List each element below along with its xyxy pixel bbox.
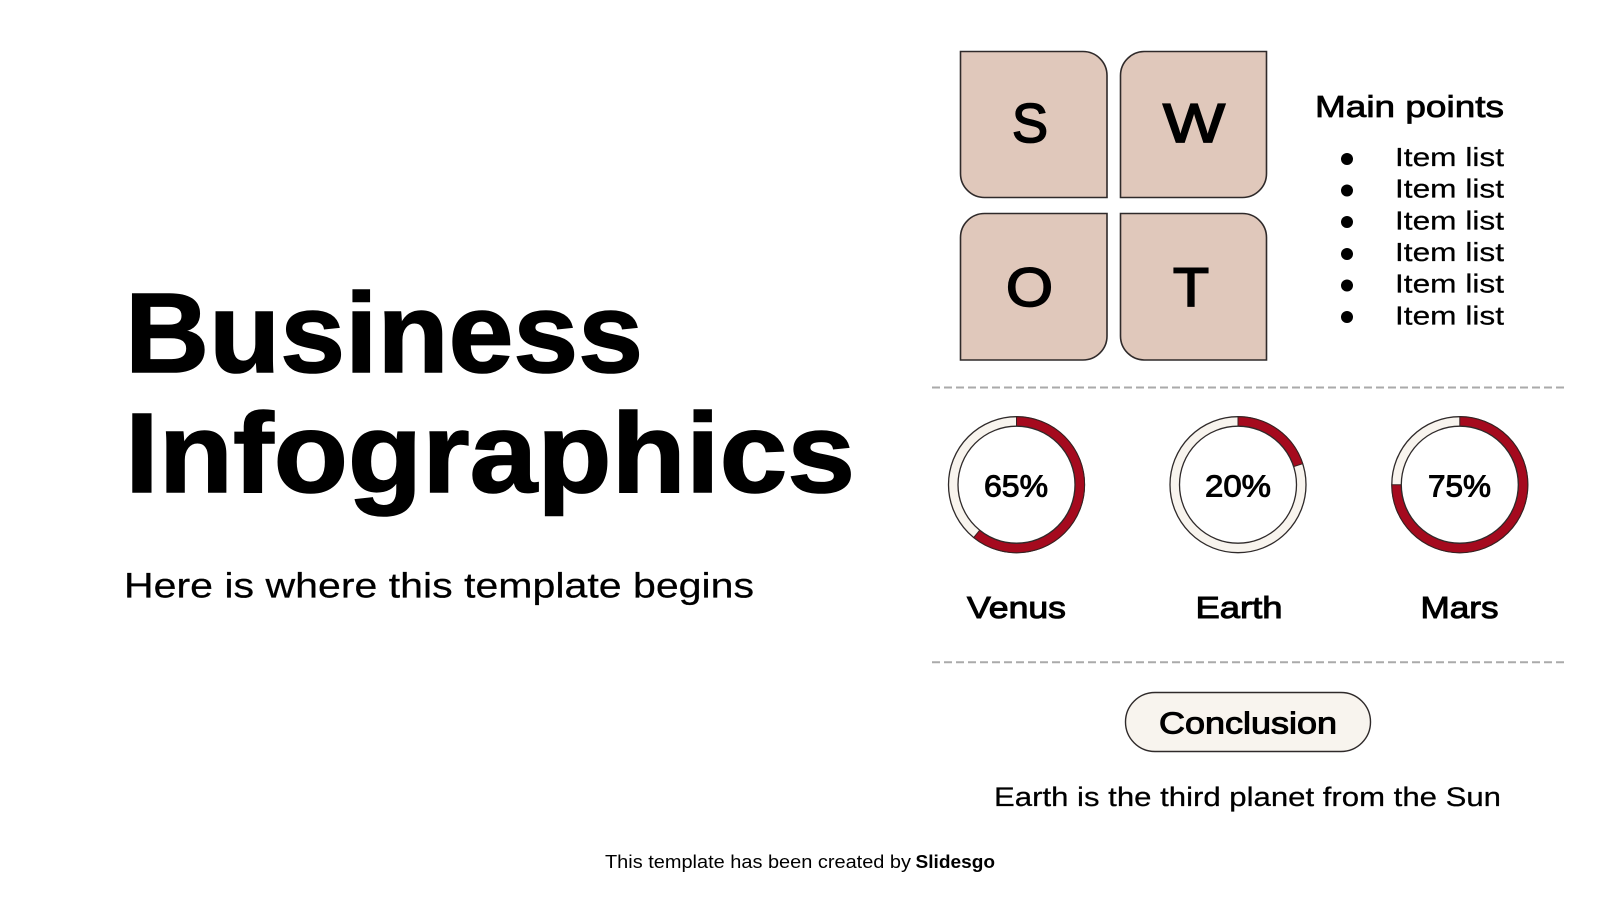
tile: S <box>960 52 1107 198</box>
tile: W: W <box>1163 92 1225 154</box>
label: Venus: Venus <box>967 590 1066 625</box>
conclusion text: Earth is the third planet from the Sun <box>994 782 1501 812</box>
tile: O <box>960 214 1107 360</box>
subtitle: Here is where this template begins <box>124 566 754 606</box>
panel: SWOT grid <box>960 52 1266 360</box>
label: Earth: Earth <box>1196 590 1282 625</box>
tile: T <box>1120 214 1266 360</box>
list: main points items: Item list <box>1395 205 1505 235</box>
footer credit: Slidesgo <box>916 852 995 872</box>
tile: O: O <box>1006 256 1053 318</box>
donut chart: Mars 75%: 75% <box>1428 469 1491 504</box>
list: main points items: Item list <box>1395 142 1505 172</box>
footer credit: This template has been created by <box>605 852 911 872</box>
donut chart: Earth 20% <box>1170 417 1306 553</box>
list: main points items: Item list <box>1395 174 1505 204</box>
title: Business <box>125 270 643 396</box>
donut chart: Venus 65% <box>948 417 1085 553</box>
tile: T: T <box>1173 256 1209 318</box>
donut chart: Venus 65%: 65% <box>984 469 1048 504</box>
tile: W <box>1120 52 1266 198</box>
list: main points items: Item list <box>1395 269 1505 299</box>
list: main points items: Item list <box>1395 300 1505 330</box>
tile: S: S <box>1012 92 1048 154</box>
list: main points items: Item list <box>1395 237 1505 267</box>
heading: main points: Main points <box>1315 89 1504 124</box>
title: Infographics <box>125 390 855 516</box>
list: main points items <box>1341 142 1505 330</box>
badge: conclusion: Conclusion <box>1159 706 1337 741</box>
title <box>125 270 855 516</box>
label: Mars: Mars <box>1420 590 1498 625</box>
donut chart: Mars 75% <box>1392 417 1528 553</box>
badge: conclusion <box>1126 692 1370 752</box>
donut chart: Earth 20%: 20% <box>1205 469 1271 504</box>
